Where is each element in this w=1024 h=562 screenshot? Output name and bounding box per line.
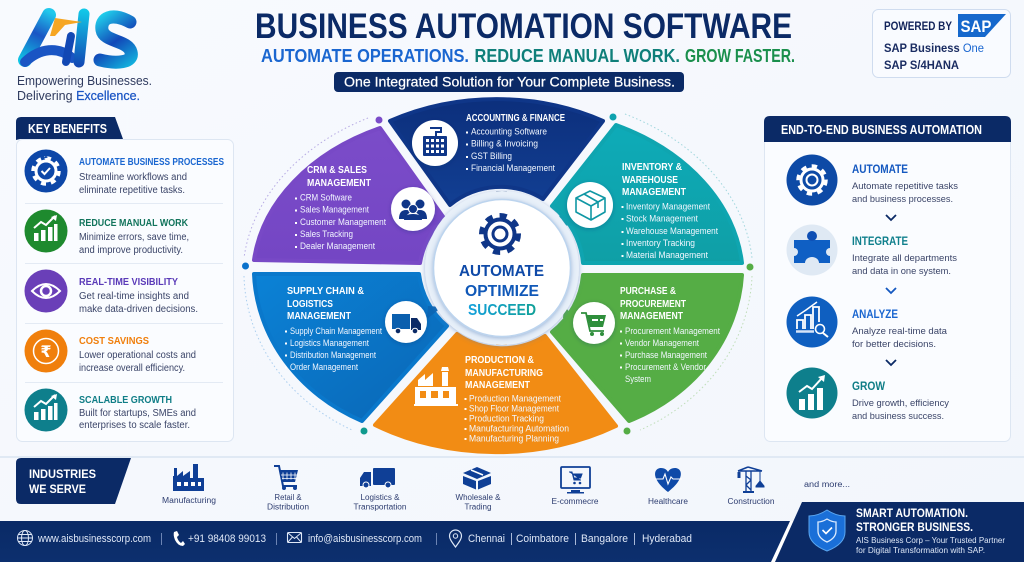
tagline pill: One Integrated Solution for Your Complete Business.: [344, 74, 675, 90]
panel: end-to-end business automation: [764, 116, 1011, 442]
step: grow: Drive growth, efficiency: [852, 398, 949, 409]
segment: crm & sales management: Customer Management: [300, 217, 386, 227]
panel: powered by SAP: SAP Business One: [884, 41, 984, 55]
segment: accounting & finance: Billing & Invoicing: [471, 138, 538, 148]
segment: inventory & warehouse management: [552, 125, 742, 263]
step: analyze: Analyze real-time data: [852, 326, 948, 337]
industry: healthcare: Healthcare: [648, 497, 689, 506]
contact: phone: [174, 531, 266, 546]
industry: e-commerce: E-commecre: [552, 497, 599, 506]
panel: powered by SAP: [872, 10, 1010, 78]
segment: inventory & warehouse management: INVENTORY &: [622, 162, 682, 173]
segment: crm & sales management: MANAGEMENT: [307, 178, 371, 189]
segment: accounting & finance: Financial Management: [471, 163, 555, 173]
benefit: scalable growth: [24, 388, 196, 432]
callout: smart automation: SMART AUTOMATION.: [856, 508, 968, 520]
benefit: real-time visibility: make data-driven decisions.: [79, 304, 198, 315]
segment: production & manufacturing management: Shop Floor Management: [469, 404, 559, 414]
industry: logistics & transportation: Logistics &: [360, 493, 400, 502]
segment: crm & sales management: CRM & SALES: [307, 165, 367, 176]
industry: healthcare: [648, 468, 689, 506]
benefit: real-time visibility: [24, 270, 198, 315]
callout: smart automation: STRONGER BUSINESS.: [856, 522, 973, 534]
segment: supply chain & logistics management: Supply Chain Management: [290, 326, 382, 336]
segment: inventory & warehouse management: Warehouse Management: [626, 226, 718, 236]
contact: website: [18, 530, 151, 546]
segment: inventory & warehouse management: MANAGEMENT: [622, 187, 686, 198]
icon: people: [391, 187, 435, 231]
icon: SAP logo: SAP: [960, 17, 992, 36]
segment: production & manufacturing management: MANAGEMENT: [465, 380, 530, 391]
benefit: scalable growth: SCALABLE GROWTH: [79, 395, 172, 406]
step: automate: and business processes.: [852, 194, 953, 205]
benefit: reduce manual work: and improve productivity.: [79, 245, 183, 256]
panel: powered by SAP: SAP S/4HANA: [884, 58, 959, 72]
step: grow: GROW: [852, 379, 886, 393]
benefit: cost savings: increase overall efficiency.: [79, 363, 185, 374]
step: analyze: for better decisions.: [852, 339, 936, 350]
benefit: cost savings: COST SAVINGS: [79, 336, 149, 347]
benefit: cost savings: Lower operational costs and: [79, 350, 196, 361]
contact: locations: Coimbatore: [516, 533, 569, 545]
tagline: Empowering Businesses.: [17, 73, 152, 88]
industry: logistics & transportation: [354, 468, 406, 512]
segment: accounting & finance: ACCOUNTING & FINANCE: [466, 113, 565, 124]
segment: production & manufacturing management: Production Management: [469, 394, 561, 404]
contact: locations: Chennai: [468, 533, 505, 545]
band: industries we serve: [0, 456, 1024, 512]
segment: inventory & warehouse management: Inventory Tracking: [626, 238, 695, 248]
center hub: SUCCEED: [468, 302, 536, 319]
subtitle: REDUCE MANUAL WORK.: [474, 46, 680, 66]
industry: retail & distribution: Distribution: [267, 502, 309, 512]
subtitle: AUTOMATE OPERATIONS.: [261, 46, 469, 66]
and more: and more...: [804, 480, 850, 489]
benefit: automate business processes: [24, 150, 224, 196]
segment: crm & sales management: Sales Management: [300, 204, 369, 214]
icon: gear: [482, 216, 518, 252]
industry: wholesale & trading: [456, 467, 501, 512]
industry: manufacturing: Manufacturing: [162, 496, 216, 505]
segment: production & manufacturing management: Manufacturing Planning: [469, 434, 559, 444]
segment: production & manufacturing management: PRODUCTION &: [465, 355, 534, 366]
dotted outer ring: [244, 114, 752, 430]
icon: factory: [414, 367, 458, 406]
heading: industries we serve: [16, 458, 131, 504]
benefit: scalable growth: enterprises to scale faster.: [79, 420, 190, 431]
industry: wholesale & trading: Wholesale &: [456, 493, 501, 502]
diagram: automation wheel: [242, 99, 754, 452]
segment: purchase & procurement management: PURCHASE &: [620, 286, 676, 297]
benefit: automate business processes: AUTOMATE BUSINESS PROCESSES: [79, 157, 224, 168]
industry: e-commerce: [552, 467, 599, 506]
industry: retail & distribution: Retail &: [274, 493, 302, 502]
contact: locations: [450, 530, 692, 547]
title: BUSINESS AUTOMATION SOFTWARE: [255, 7, 792, 46]
panel: powered by SAP: POWERED BY: [884, 19, 952, 33]
benefit: real-time visibility: REAL-TIME VISIBILITY: [79, 277, 178, 288]
industry: manufacturing: [162, 464, 216, 505]
segment: accounting & finance: Accounting Software: [471, 126, 547, 136]
contact: locations: Hyderabad: [642, 533, 692, 545]
icon: cart: [573, 302, 615, 344]
heading: industries we serve: WE SERVE: [29, 482, 86, 496]
benefit: reduce manual work: [24, 210, 189, 256]
step: automate: [786, 154, 958, 206]
industry: logistics & transportation: Transportation: [354, 502, 406, 512]
segment: accounting & finance: [390, 99, 603, 205]
segment: purchase & procurement management: PROCUREMENT: [620, 299, 686, 310]
segment: purchase & procurement management: [552, 275, 742, 421]
benefit: scalable growth: Built for startups, SMEs and: [79, 408, 196, 419]
benefit: automate business processes: Streamline workflows and: [79, 172, 187, 183]
ring dots: [242, 114, 754, 434]
segment: production & manufacturing management: MANUFACTURING: [465, 368, 543, 379]
callout: smart automation: [771, 502, 1024, 562]
segment: supply chain & logistics management: LOGISTICS: [287, 299, 333, 310]
segment: supply chain & logistics management: MANAGEMENT: [287, 311, 351, 322]
heading: end-to-end: [764, 116, 1011, 142]
step: integrate: [786, 224, 957, 277]
callout: smart automation: AIS Business Corp – Your Trusted Partner: [856, 536, 1005, 545]
segment: supply chain & logistics management: [254, 274, 447, 421]
industry: construction: [728, 467, 774, 506]
tagline: Delivering Excellence.: [17, 88, 140, 103]
center hub: AUTOMATE: [459, 263, 544, 280]
icon: shield: [809, 510, 845, 551]
arrow: [886, 360, 896, 365]
footer: [0, 521, 1024, 562]
heading: end-to-end: END-TO-END BUSINESS AUTOMATION: [781, 122, 982, 137]
step: integrate: INTEGRATE: [852, 234, 908, 248]
step: analyze: [786, 296, 948, 350]
center hub: OPTIMIZE: [465, 283, 539, 300]
step: automate: Automate repetitive tasks: [852, 181, 958, 192]
segment: inventory & warehouse management: Inventory Management: [626, 202, 710, 212]
subtitle: GROW FASTER.: [685, 46, 795, 66]
arrow: [886, 215, 896, 220]
segment: crm & sales management: [254, 128, 445, 263]
arrow: [886, 288, 896, 293]
step: automate: AUTOMATE: [852, 162, 908, 176]
industry: construction: Construction: [728, 497, 774, 506]
segment: inventory & warehouse management: WAREHOUSE: [622, 175, 678, 186]
segment: crm & sales management: CRM Software: [300, 192, 352, 202]
industry: retail & distribution: [267, 466, 309, 512]
segment: purchase & procurement management: Purchase Management: [625, 350, 707, 360]
segment: inventory & warehouse management: Material Management: [626, 250, 708, 260]
contact: email: info@aisbusinesscorp.com: [308, 533, 422, 545]
segment: production & manufacturing management: [375, 334, 616, 452]
icon: calculator: [412, 120, 458, 166]
benefit: cost savings: [24, 330, 196, 374]
segment: inventory & warehouse management: Stock Management: [626, 214, 698, 224]
contact: phone: +91 98408 99013: [188, 533, 266, 545]
segment: purchase & procurement management: MANAGEMENT: [620, 311, 683, 322]
step: analyze: ANALYZE: [852, 307, 898, 321]
segment: supply chain & logistics management: Order Management: [290, 362, 358, 372]
segment: purchase & procurement management: Procurement & Vendor: [625, 362, 706, 372]
heading: key benefits: [16, 117, 123, 140]
icon: box: [567, 182, 613, 228]
segment: supply chain & logistics management: Logistics Management: [290, 338, 369, 348]
contact: website: www.aisbusinesscorp.com: [37, 533, 151, 545]
segment: supply chain & logistics management: Distribution Management: [290, 350, 376, 360]
benefit: cost savings: ₹: [40, 342, 52, 361]
segment: crm & sales management: Dealer Management: [300, 241, 375, 251]
segment: accounting & finance: GST Billing: [471, 151, 512, 161]
segment: supply chain & logistics management: SUPPLY CHAIN &: [287, 286, 364, 297]
contact: locations: Bangalore: [581, 533, 628, 545]
benefit: reduce manual work: Minimize errors, save time,: [79, 232, 189, 243]
benefit: reduce manual work: REDUCE MANUAL WORK: [79, 218, 189, 229]
subtitle: [261, 46, 795, 66]
panel: key benefits: [16, 117, 234, 442]
segment: production & manufacturing management: Manufacturing Automation: [469, 424, 569, 434]
heading: industries we serve: INDUSTRIES: [29, 467, 96, 481]
icon: truck: [385, 301, 427, 343]
segment: production & manufacturing management: Production Tracking: [469, 414, 544, 424]
industry: wholesale & trading: Trading: [464, 502, 492, 512]
step: integrate: and data in one system.: [852, 266, 951, 277]
tagline: [17, 73, 152, 103]
segment: purchase & procurement management: Procurement Management: [625, 326, 720, 336]
center hub: [425, 191, 579, 345]
callout: smart automation: for Digital Transformation with SAP.: [856, 546, 985, 555]
heading: key benefits: KEY BENEFITS: [28, 121, 107, 136]
step: integrate: Integrate all departments: [852, 253, 957, 264]
logo: AIS: [25, 14, 131, 62]
step: grow: [786, 368, 949, 422]
step: grow: and business success.: [852, 411, 944, 422]
segment: purchase & procurement management: Vendor Management: [625, 338, 699, 348]
segment: crm & sales management: Sales Tracking: [300, 229, 353, 239]
benefit: automate business processes: eliminate repetitive tasks.: [79, 185, 185, 196]
benefit: real-time visibility: Get real-time insights and: [79, 291, 189, 302]
segment: purchase & procurement management: System: [625, 374, 651, 384]
